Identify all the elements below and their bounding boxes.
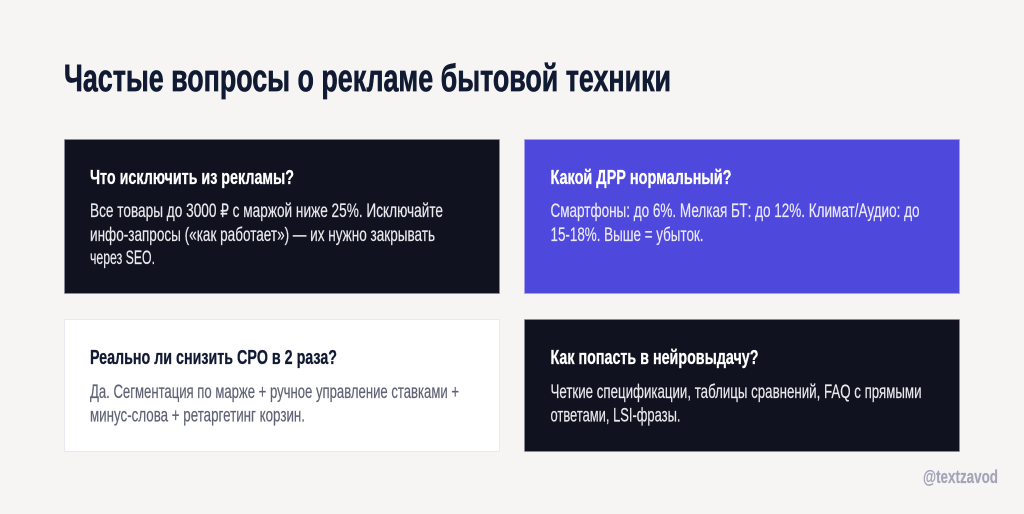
heading: что исключить: Что исключить из рекламы?: [90, 166, 294, 189]
heading: нейровыдача: Как попасть в нейровыдачу?: [550, 346, 758, 369]
text block: что исключить: [90, 201, 443, 269]
panel: какой ДРР нормальный: [524, 140, 960, 294]
panel: реально ли снизить CPO: [64, 320, 500, 452]
text block: какой ДРР: 15-18%. Выше = убыток.: [550, 225, 704, 246]
text block: нейровыдача: [550, 382, 922, 426]
text block: что исключить: Все товары до 3000 ₽ с маржой ниже 25%. Исключайте: [90, 201, 443, 222]
heading: снизить CPO: Реально ли снизить CPO в 2 раза?: [90, 346, 337, 369]
text block: что исключить: через SEO.: [90, 248, 155, 269]
text block: какой ДРР: [550, 201, 920, 246]
text block: снизить CPO: [90, 382, 459, 426]
title: Частые вопросы о рекламе бытовой техники: [64, 58, 671, 100]
watermark: @textzavod: [923, 466, 998, 487]
text block: снизить CPO: минус-слова + ретаргетинг корзин.: [90, 406, 305, 426]
heading: какой ДРР: Какой ДРР нормальный?: [550, 166, 732, 189]
text block: снизить CPO: Да. Сегментация по марже + ручное управление ставками +: [90, 382, 459, 403]
panel: что исключить из рекламы: [64, 140, 500, 294]
text block: нейровыдача: ответами, LSI-фразы.: [550, 406, 680, 426]
panel: как попасть в нейровыдачу: [524, 320, 960, 452]
text block: что исключить: инфо-запросы («как работает») — их нужно закрывать: [90, 225, 435, 246]
